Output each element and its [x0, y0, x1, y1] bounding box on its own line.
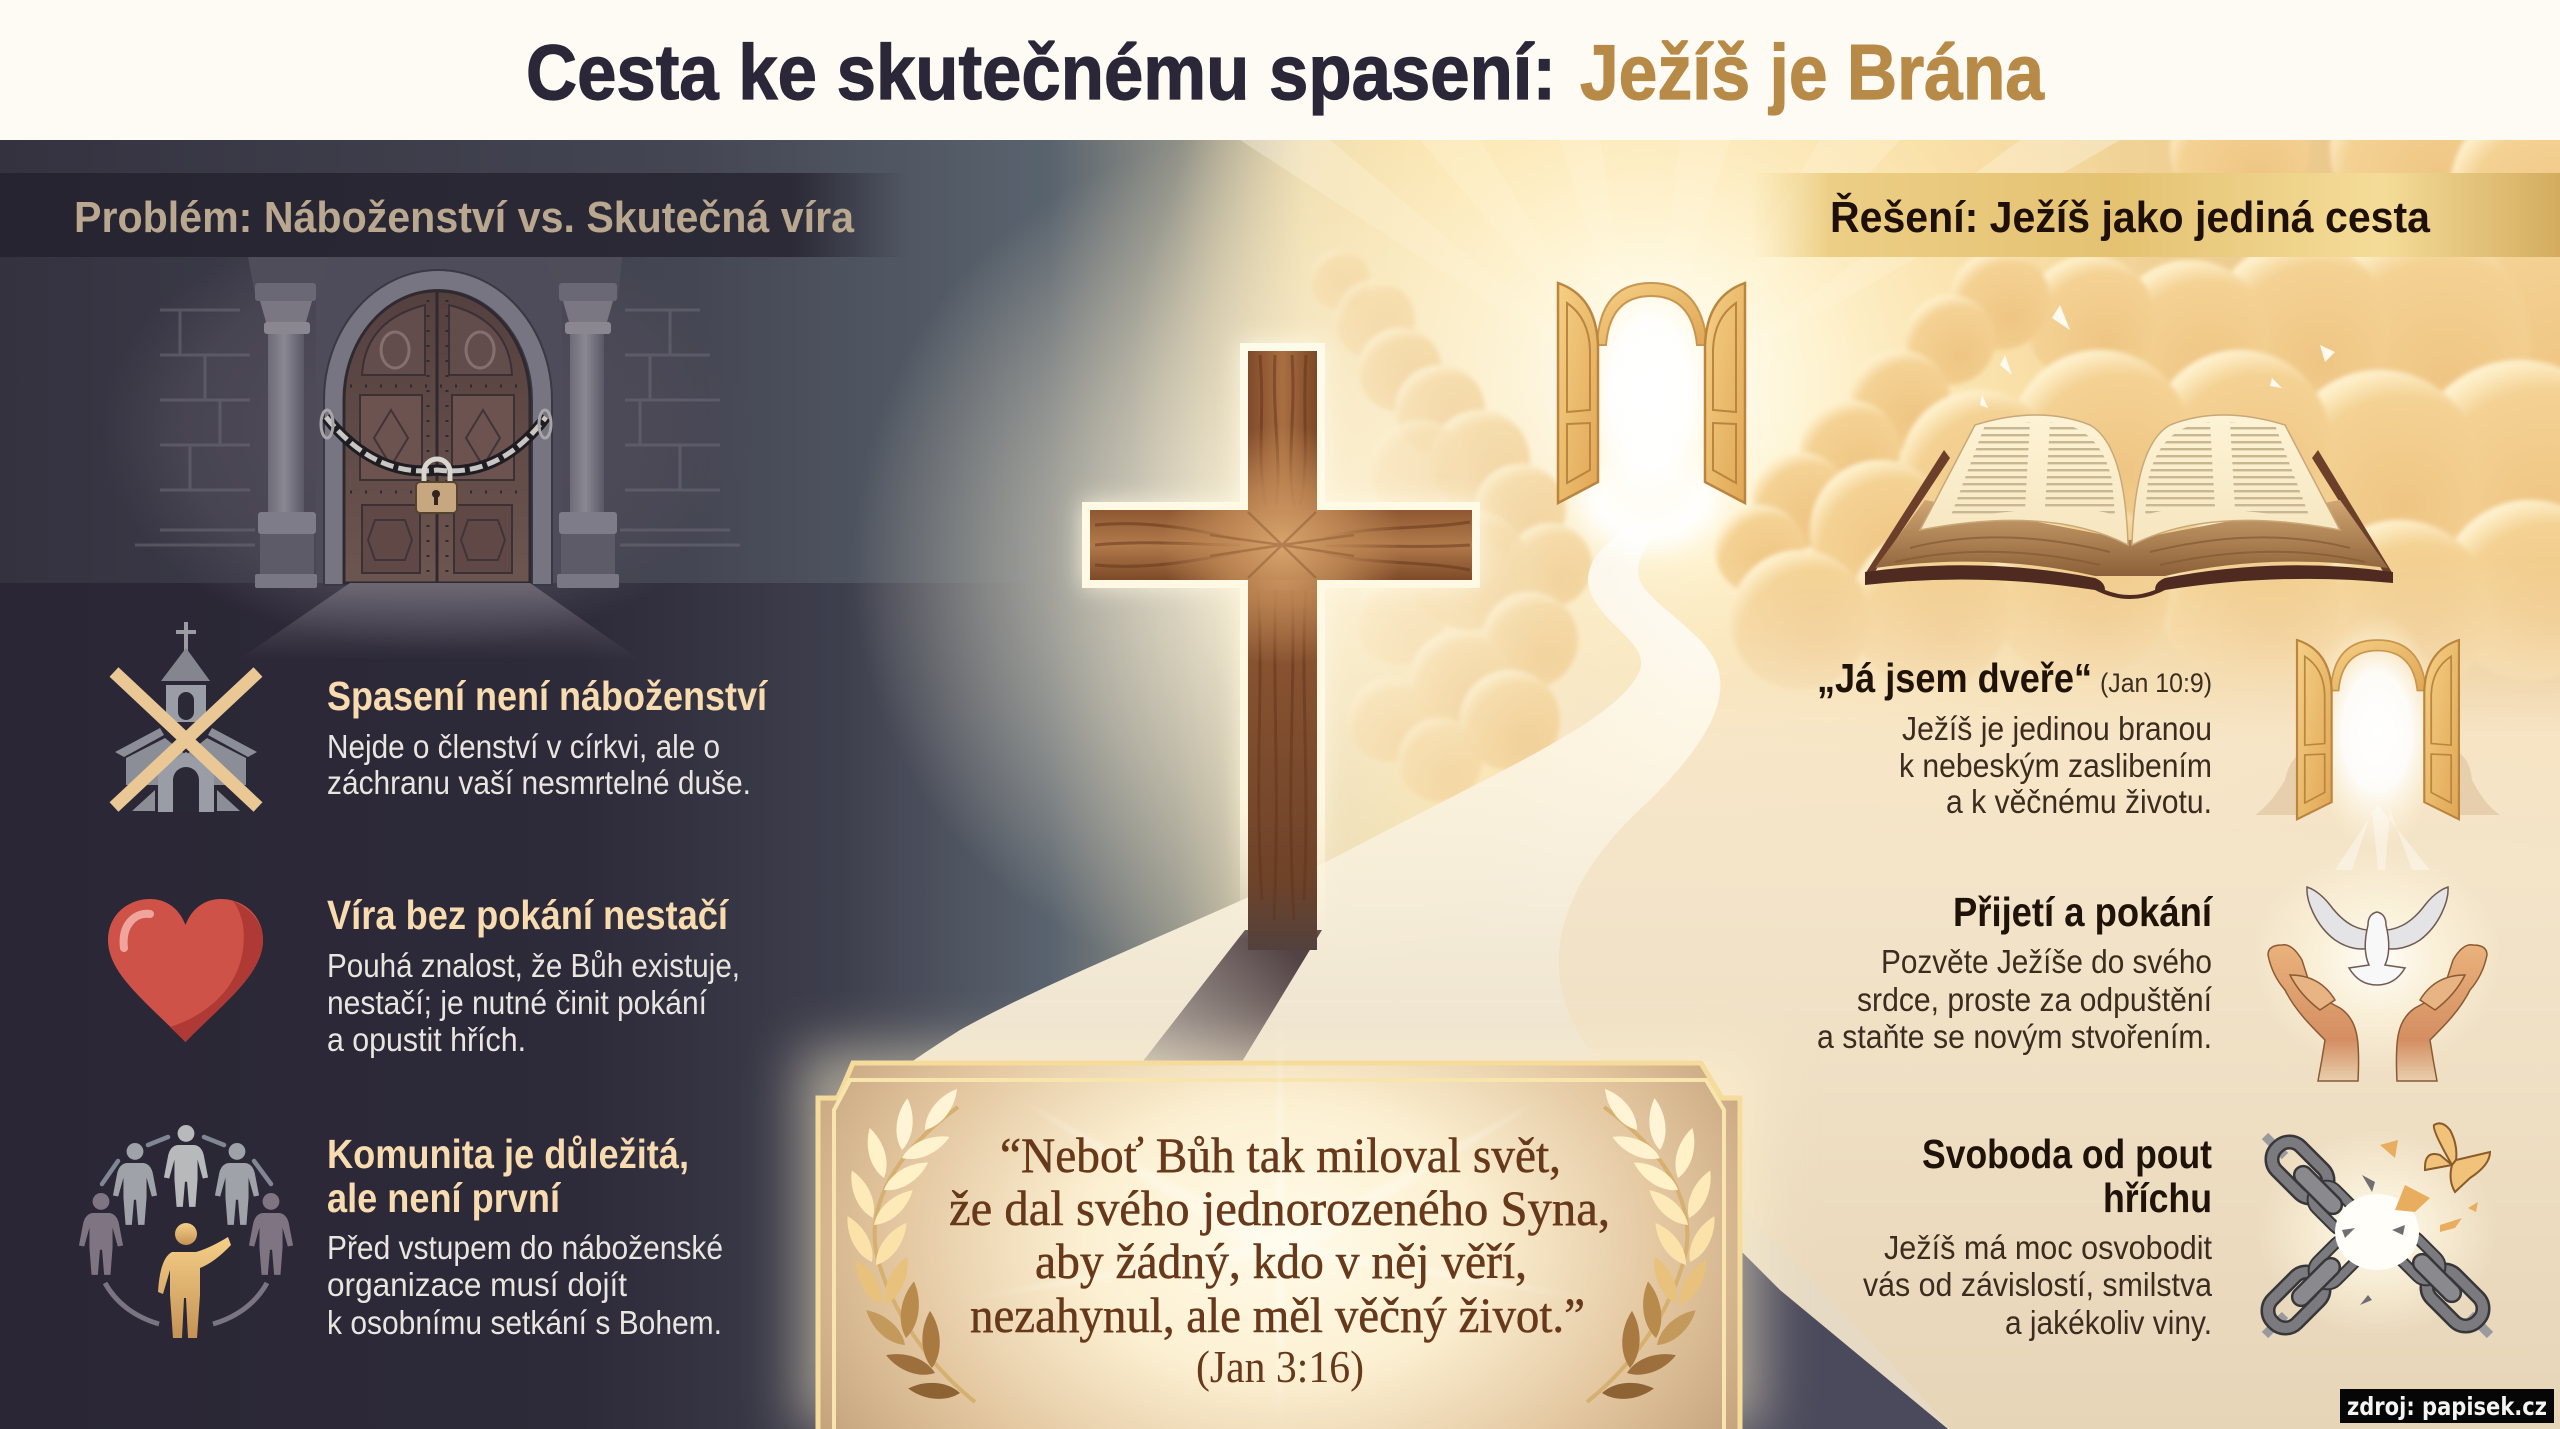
text block: Svoboda od pout hříchu	[1863, 1131, 2213, 1341]
verse text: “Neboť Bůh tak miloval svět,	[1000, 1127, 1561, 1183]
icon: broken chains and butterfly	[2257, 1123, 2497, 1337]
cross shadow	[1140, 930, 1322, 1065]
left column	[255, 283, 317, 588]
icon: dove and open hands	[2252, 845, 2502, 1081]
chain	[321, 410, 551, 471]
text block: Komunita je důležitá: ale není první	[327, 1175, 561, 1221]
floor threshold	[238, 583, 640, 660]
text block: Komunita je důležitá: organizace musí dojít	[327, 1266, 627, 1303]
plaque: Bible verse	[818, 1020, 1740, 1429]
right hand	[2396, 945, 2487, 1081]
title accent part: Ježíš je Brána	[1580, 28, 2045, 116]
verse text: (Jan 3:16)	[1196, 1341, 1364, 1392]
verse text: že dal svého jednorozeného Syna,	[949, 1180, 1610, 1236]
text block: Spasení není náboženství: Nejde o členství v církvi, ale o	[327, 728, 720, 765]
dove	[2307, 887, 2448, 985]
text block: Komunita je důležitá	[327, 1131, 723, 1341]
text block: Přijetí a pokání: Přijetí a pokání	[1953, 889, 2213, 935]
laurel left	[841, 1084, 975, 1402]
verse text: nezahynul, ale měl věčný život.”	[970, 1287, 1585, 1343]
icon: church crossed out	[114, 622, 258, 812]
butterfly	[2425, 1123, 2490, 1192]
icon: community circle	[79, 1125, 293, 1338]
gold person pointing	[158, 1223, 231, 1338]
text block: Já jsem dveře	[1817, 655, 2212, 820]
text block: Víra bez pokání nestačí: Víra bez pokání nestačí	[327, 892, 729, 938]
text block: Spasení není náboženství: záchranu vaší nesmrtelné duše.	[327, 764, 751, 801]
plaque glow	[800, 1050, 1760, 1429]
padlock	[416, 459, 457, 513]
text block: Svoboda od pout hříchu: vás od závislostí, smilstva	[1863, 1266, 2213, 1303]
laurel right	[1587, 1084, 1721, 1402]
text block: Komunita je důležitá: Komunita je důležitá,	[327, 1131, 689, 1177]
lower right cream field	[1500, 560, 2560, 1429]
door leaves	[344, 291, 530, 583]
glow around cross	[850, 130, 1710, 990]
icon: open door	[2255, 613, 2500, 870]
text block: Já jsem dveře: k nebeským zaslibením	[1899, 747, 2212, 784]
arch frame	[324, 270, 552, 585]
text block: Spasení není náboženství	[327, 673, 768, 801]
clouds behind right side	[1715, 60, 2560, 700]
right band heading: Řešení: Ježíš jako jediná cesta	[1830, 192, 2430, 242]
illustration: locked church door	[135, 257, 740, 660]
text block: Přijetí a pokání: a staňte se novým stvořením.	[1817, 1018, 2212, 1055]
left wall backdrop	[100, 210, 760, 650]
text block: Přijetí a pokání: srdce, proste za odpuštění	[1857, 981, 2212, 1018]
text block: Já jsem dveře: Ježíš je jedinou branou	[1902, 710, 2212, 747]
text block: Víra bez pokání nestačí: a opustit hřích.	[327, 1021, 526, 1058]
illustration: open book	[1865, 415, 2393, 599]
panel header: title	[0, 0, 2560, 140]
birds in the sky	[1980, 305, 2335, 408]
text block: Já jsem dveře: „Já jsem dveře“	[1817, 655, 2092, 701]
icon: heart	[108, 899, 263, 1042]
verse text: aby žádný, kdo v něj věří,	[1035, 1233, 1527, 1289]
text block: Komunita je důležitá: Před vstupem do náboženské	[327, 1229, 723, 1266]
lower left dark field	[0, 583, 1050, 1429]
clouds left of the gate	[1310, 250, 1592, 802]
winding road to the gate	[818, 495, 1950, 1429]
text block: Spasení není náboženství: Spasení není náboženství	[327, 673, 768, 719]
text block: Přijetí a pokání	[1817, 889, 2213, 1055]
left band heading: Problém: Náboženství vs. Skutečná víra	[74, 193, 854, 242]
text block: Víra bez pokání nestačí: nestačí; je nutné činit pokání	[327, 984, 707, 1021]
wooden cross	[1082, 343, 1480, 950]
text block: Já jsem dveře: (Jan 10:9)	[2100, 668, 2212, 698]
text block: Svoboda od pout hříchu: Ježíš má moc osvobodit	[1884, 1229, 2212, 1266]
verse text	[949, 1127, 1610, 1392]
dark wedge beside plaque	[1730, 1240, 1948, 1429]
left section band	[0, 173, 910, 257]
text block: Víra bez pokání nestačí: Pouhá znalost, že Bůh existuje,	[327, 947, 740, 984]
right column	[557, 283, 619, 588]
illustration: open heavenly gate	[1558, 250, 1745, 550]
left hand	[2268, 945, 2359, 1081]
text block: Svoboda od pout hříchu: a jakékoliv viny.	[2005, 1304, 2212, 1341]
text block: Víra bez pokání nestačí	[327, 892, 740, 1058]
text block: Já jsem dveře: a k věčnému životu.	[1946, 783, 2212, 820]
text block: Svoboda od pout hříchu: hříchu	[2103, 1175, 2212, 1221]
title main part: Cesta ke skutečnému spasení:	[526, 28, 1556, 116]
text block: Komunita je důležitá: k osobnímu setkání s Bohem.	[327, 1304, 722, 1341]
text block: Svoboda od pout hříchu: Svoboda od pout	[1922, 1131, 2212, 1177]
right section band	[1750, 173, 2560, 257]
text block: Přijetí a pokání: Pozvěte Ježíše do svého	[1881, 943, 2212, 980]
